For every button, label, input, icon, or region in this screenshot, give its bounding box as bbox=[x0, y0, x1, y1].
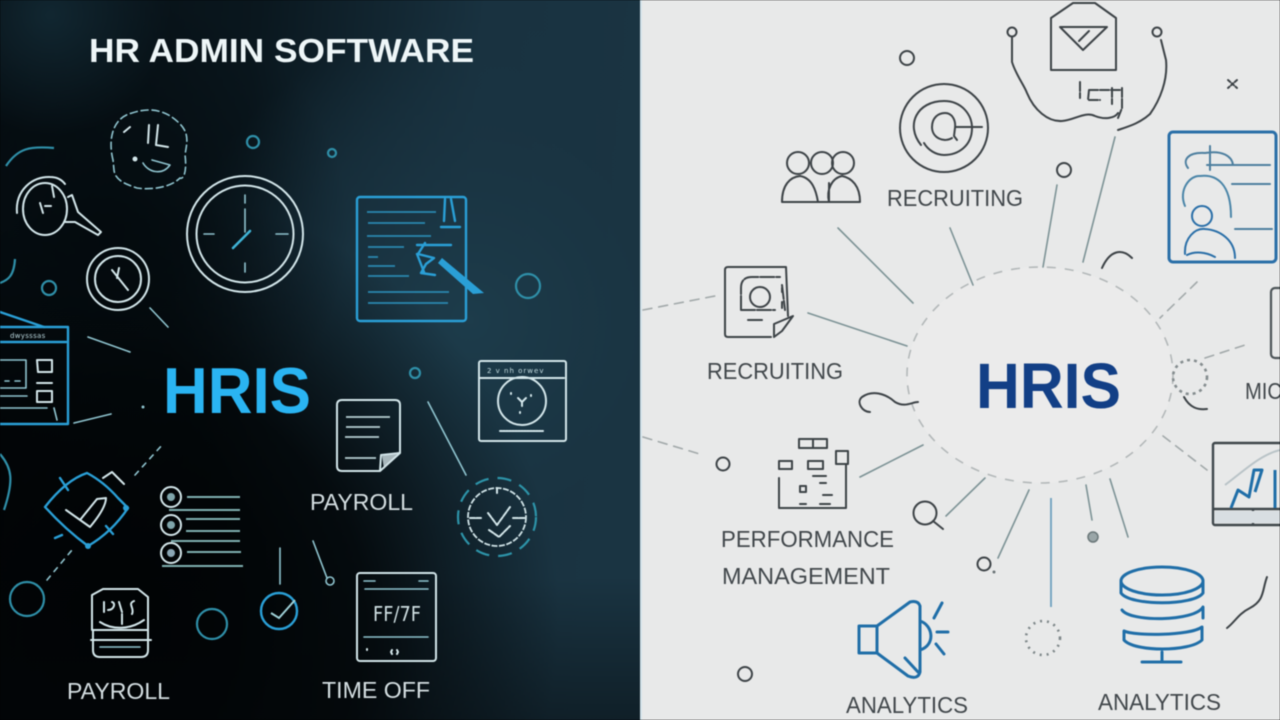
icon: check circle bbox=[261, 548, 297, 629]
small ring bbox=[716, 458, 730, 470]
label: recruiting: RECRUITING bbox=[887, 185, 1023, 211]
small ring bbox=[1057, 163, 1071, 177]
dotted ring bbox=[1026, 621, 1060, 655]
panel: right light side bbox=[640, 0, 1280, 720]
ring bbox=[10, 582, 44, 616]
icon: blue gear bug bbox=[45, 472, 129, 549]
icon: magnifier bbox=[914, 502, 943, 529]
label: analytics: ANALYTICS bbox=[846, 692, 968, 718]
wire to database bbox=[1227, 577, 1267, 628]
icon: magnifying glass bbox=[17, 177, 101, 235]
label: payroll: PAYROLL bbox=[67, 678, 170, 704]
icon: org chart bbox=[779, 439, 848, 508]
label: recruiting: RECRUITING bbox=[707, 358, 843, 384]
panel: left dark side bbox=[0, 0, 640, 720]
icon: target with check bbox=[428, 402, 536, 556]
icon: white document with folded corner bbox=[337, 400, 400, 471]
dotted ring with tail bbox=[1173, 360, 1207, 409]
HRIS heading right: HRIS bbox=[976, 350, 1121, 422]
small ring bbox=[738, 667, 752, 681]
curl connector bbox=[860, 393, 918, 412]
icon: curved connector bbox=[6, 147, 54, 166]
icon: envelope with wires bbox=[1008, 3, 1166, 130]
small cross mark bbox=[1228, 80, 1237, 88]
connector lines to hub bbox=[643, 137, 1245, 607]
label: payroll: PAYROLL bbox=[310, 489, 413, 515]
small ring bbox=[410, 368, 420, 378]
label: performance: PERFORMANCE bbox=[721, 526, 894, 552]
connector with node bbox=[313, 541, 334, 585]
icon: recruiting document bbox=[725, 267, 793, 337]
small node bbox=[1088, 532, 1098, 542]
icon: small clock bbox=[87, 248, 149, 310]
icon: at sign target bbox=[900, 84, 988, 172]
label: management: MANAGEMENT bbox=[722, 563, 890, 589]
icon: database bbox=[1121, 567, 1203, 662]
label: time off: TIME OFF bbox=[322, 677, 430, 703]
small ring bbox=[516, 274, 540, 298]
HRIS heading left: HRIS bbox=[163, 354, 311, 427]
left panel background bbox=[0, 0, 640, 720]
ring bbox=[197, 609, 227, 639]
label: analytics: ANALYTICS bbox=[1098, 689, 1221, 715]
right panel background bbox=[640, 0, 1280, 720]
connector lines bbox=[0, 259, 168, 580]
panel edge bbox=[640, 0, 642, 720]
small ring bbox=[247, 136, 259, 148]
icon: tablet: FF/7F bbox=[373, 602, 421, 626]
icon: left window panel bbox=[0, 312, 68, 424]
icon: payroll cash register bbox=[91, 589, 151, 657]
small ring bbox=[900, 51, 914, 65]
icon: blue document with pen bbox=[357, 197, 484, 321]
central dashed hub bbox=[907, 267, 1173, 483]
icon: checklist bbox=[161, 487, 243, 566]
icon: dashboard window bbox=[479, 361, 566, 441]
small magnifier node bbox=[978, 558, 996, 574]
icon: speaker bbox=[859, 602, 948, 677]
icon: large clock bbox=[187, 176, 303, 292]
icon: blue profile card bbox=[1169, 132, 1276, 262]
icon: monitor with chart bbox=[1213, 443, 1280, 525]
small ring bbox=[42, 281, 56, 295]
icon: tablet bbox=[357, 573, 436, 661]
icon: monitor top right bbox=[1271, 288, 1280, 358]
icon: dashed clock face bbox=[111, 110, 187, 189]
icon: people group bbox=[782, 152, 860, 202]
title: HR ADMIN SOFTWARE bbox=[89, 32, 474, 69]
icon: left window panel: dwysssas bbox=[10, 332, 46, 340]
icon: dashboard window: 2 v nh orwev bbox=[487, 367, 544, 375]
small ring bbox=[328, 149, 336, 157]
